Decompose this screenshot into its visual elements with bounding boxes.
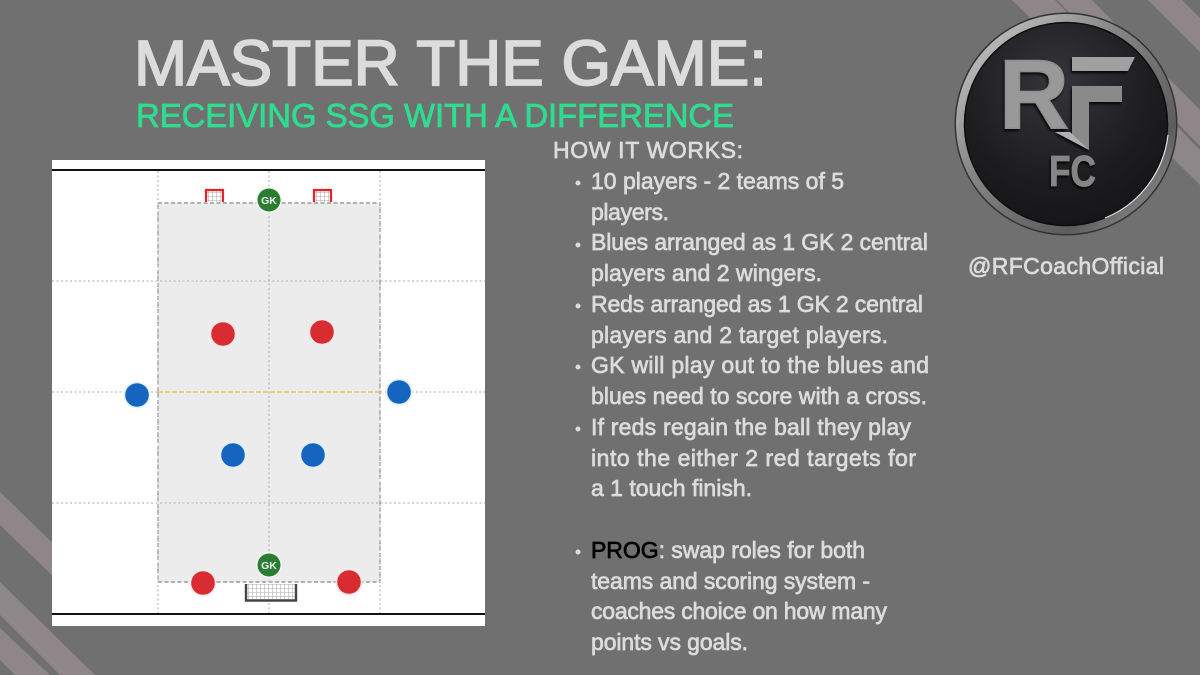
- heading: how it works: HOW IT WORKS:: [553, 137, 743, 163]
- red players: [190, 318, 362, 596]
- social handle: @RFCoachOfficial: [968, 253, 1164, 279]
- text block: rules list: coaches choice on how many: [591, 598, 888, 624]
- icon: left red goal: [206, 190, 223, 202]
- text block: rules list: a 1 touch finish.: [591, 475, 752, 501]
- blue players: [124, 378, 412, 468]
- icon: bottom goal: [246, 584, 296, 600]
- panel: pitch diagram: [52, 160, 485, 626]
- text block: rules list: [576, 168, 929, 655]
- text block: rules list: points vs goals.: [591, 629, 748, 655]
- text block: rules list: If reds regain the ball they play: [591, 414, 912, 440]
- text block: rules list: PROG: swap roles for both: [591, 537, 865, 563]
- text block: rules list: 10 players - 2 teams of 5: [591, 168, 844, 194]
- text block: rules list: teams and scoring system -: [591, 568, 870, 594]
- text block: rules list: players.: [591, 199, 669, 225]
- logo: RF FC badge: R: [999, 39, 1069, 149]
- logo: RF FC badge: [954, 12, 1178, 236]
- text block: rules list: players and 2 target players.: [591, 322, 888, 348]
- icon: right red goal: [314, 190, 331, 202]
- bottom goalkeeper: GK: [261, 560, 277, 572]
- text block: rules list: blues need to score with a cross.: [591, 383, 927, 409]
- text block: rules list: into the either 2 red targets for: [591, 445, 916, 471]
- top goalkeeper: [256, 187, 282, 213]
- bottom goalkeeper: [256, 552, 282, 578]
- logo: RF FC badge: FC: [1049, 147, 1096, 196]
- text block: rules list: GK will play out to the blues and: [591, 352, 929, 378]
- text block: rules list: players and 2 wingers.: [591, 260, 822, 286]
- text block: rules list: Reds arranged as 1 GK 2 central: [591, 291, 923, 317]
- top goalkeeper: GK: [261, 195, 277, 207]
- subtitle: RECEIVING SSG WITH A DIFFERENCE: [136, 97, 734, 134]
- title: MASTER THE GAME:: [134, 27, 767, 99]
- text block: rules list: Blues arranged as 1 GK 2 central: [591, 229, 928, 255]
